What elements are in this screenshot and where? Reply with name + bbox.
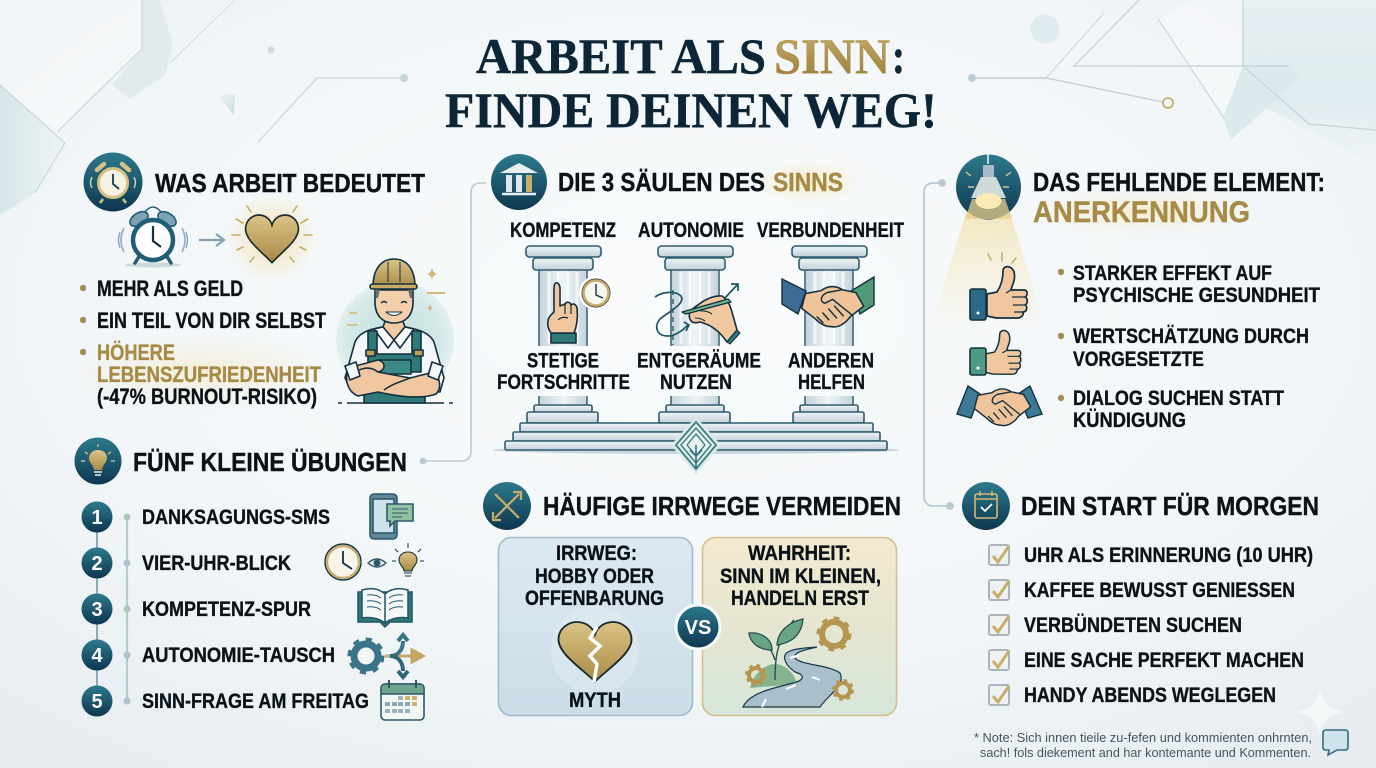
bullet list: MEHR ALS GELD (97, 276, 243, 301)
bullet list (1058, 262, 1320, 432)
footnote (974, 730, 1312, 760)
heading: FÜNF KLEINE ÜBUNGEN (133, 447, 407, 477)
heading: ANERKENNUNG (1033, 196, 1250, 229)
bullet list: DIALOG SUCHEN STATT (1073, 387, 1284, 410)
pillar sub labels (497, 350, 874, 394)
heading: WAS ARBEIT BEDEUTET (155, 168, 425, 198)
decoration: top-right geometric shapes (968, 0, 1376, 165)
bullet list: HÖHERE (97, 340, 175, 365)
title: ARBEIT ALS (476, 28, 766, 84)
icon: gear and diverging arrows (350, 635, 423, 677)
title: : (892, 28, 905, 84)
item 2: KAFFEE BEWUSST GENIESSEN (1024, 579, 1295, 602)
step 2 (82, 548, 291, 578)
card: Irrweg: HOBBY ODER (535, 565, 654, 588)
bullet list: (-47% BURNOUT-RISIKO) (97, 384, 317, 409)
pillar labels: KOMPETENZ (510, 219, 616, 242)
bullet list: LEBENSZUFRIEDENHEIT (97, 362, 321, 387)
step 5 (82, 686, 369, 716)
icon: small thumbs up (970, 331, 1021, 375)
heading (1025, 167, 1325, 236)
heading: DEIN START FÜR MORGEN (1021, 491, 1319, 521)
bullet list: EIN TEIL VON DIR SELBST (97, 308, 326, 333)
step 2: VIER-UHR-BLICK (142, 552, 291, 575)
card: Irrweg: MYTH (569, 689, 621, 712)
icon: handshake (957, 386, 1042, 426)
heading: DAS FEHLENDE ELEMENT: (1033, 167, 1325, 197)
card: Wahrheit: SINN IM KLEINEN, (720, 565, 881, 588)
icon: raised finger and clock (548, 278, 611, 343)
icon: clock, eye and bulb (325, 543, 424, 580)
icon: calendar check badge (962, 482, 1010, 530)
icon: handshake, blue and green (782, 277, 874, 327)
heading: HÄUFIGE IRRWEGE VERMEIDEN (543, 491, 901, 521)
bullet list (65, 276, 335, 410)
panel: Das fehlende Element (928, 154, 1325, 432)
step 2: 2 (91, 553, 103, 575)
icon: plant, road and gears (743, 619, 852, 707)
title: SINN (774, 28, 890, 84)
card: Wahrheit: HANDELN ERST (731, 587, 869, 610)
pillar labels (510, 219, 904, 242)
bullet list: WERTSCHÄTZUNG DURCH (1073, 325, 1309, 348)
icon: calendar (381, 680, 424, 720)
vs badge (676, 605, 720, 649)
panel: Dein Start für morgen (962, 482, 1348, 760)
step 4: AUTONOMIE-TAUSCH (142, 644, 335, 667)
step 5: 5 (91, 691, 103, 713)
panel: Was Arbeit bedeutet (65, 152, 454, 410)
title (445, 28, 937, 138)
connector: Das fehlende Element to Dein Start (924, 180, 953, 509)
card: Irrweg (498, 538, 692, 716)
pillar labels: VERBUNDENHEIT (757, 219, 904, 242)
icon: temple badge (491, 154, 547, 210)
step 1: 1 (91, 507, 103, 529)
card: Wahrheit: WAHRHEIT: (748, 542, 851, 565)
footnote: sach! fols diekement and har kontemante und Kommenten. (980, 745, 1311, 760)
icon: worker with helmet (336, 259, 454, 403)
icon: alarm clock badge (84, 152, 142, 212)
vs badge: VS (685, 617, 711, 639)
step 1 (82, 502, 330, 532)
bullet list: STARKER EFFEKT AUF (1073, 262, 1272, 285)
icon: golden heart (228, 194, 316, 282)
icon: phone with message (370, 494, 413, 539)
pillar labels: AUTONOMIE (638, 219, 744, 242)
pillars and steps (492, 246, 900, 454)
title: FINDE DEINEN WEG! (445, 82, 937, 138)
light cone (928, 200, 1048, 335)
pillar sub labels: NUTZEN (660, 371, 732, 394)
item 4: EINE SACHE PERFEKT MACHEN (1024, 649, 1304, 672)
item 1: UHR ALS ERINNERUNG (10 UHR) (1024, 544, 1313, 567)
step 1: DANKSAGUNGS-SMS (142, 506, 330, 529)
step 3: 3 (91, 599, 103, 621)
step 4: 4 (91, 645, 103, 667)
pillar sub labels: ANDEREN (788, 350, 874, 372)
heading: SINNS (773, 167, 843, 197)
connector: Fünf kleine Übungen to Die 3 Säulen (420, 183, 486, 464)
decorative sparkle (1296, 688, 1344, 736)
step 4 (82, 640, 335, 670)
bullet list: KÜNDIGUNG (1073, 409, 1186, 432)
heading: DIE 3 SÄULEN DES (558, 167, 765, 197)
pillar sub labels: STETIGE (527, 350, 599, 372)
icon: light bulb badge (74, 438, 122, 484)
timeline (97, 514, 130, 704)
icon: labyrinth diamond (673, 419, 719, 472)
footnote: * Note: Sich innen tieile zu-fefen und kommienten onhrnten, (974, 730, 1312, 745)
icon: open book (358, 589, 412, 627)
step 3: KOMPETENZ-SPUR (142, 598, 311, 621)
icon: large thumbs up (970, 253, 1027, 320)
pillar sub labels: HELFEN (798, 371, 865, 394)
icon: lamp badge (956, 154, 1021, 220)
heading (558, 160, 863, 204)
panel: Häufige Irrwege vermeiden (483, 482, 901, 716)
bullet list: VORGESETZTE (1073, 348, 1204, 371)
bullet list: PSYCHISCHE GESUNDHEIT (1073, 284, 1320, 307)
pillar sub labels: ENTGERÄUME (637, 350, 761, 372)
item 5: HANDY ABENDS WEGLEGEN (1024, 684, 1276, 707)
decoration: top-left geometric shapes (0, 0, 408, 215)
pillar sub labels: FORTSCHRITTE (497, 371, 630, 394)
card: Wahrheit (702, 538, 896, 716)
step 5: SINN-FRAGE AM FREITAG (142, 690, 369, 713)
step 3 (82, 594, 311, 624)
icon: ringing alarm clock (118, 207, 188, 268)
icon: crossing arrows badge (483, 482, 531, 530)
card: Irrweg: OFFENBARUNG (525, 587, 664, 610)
arrow (199, 234, 224, 246)
icon: broken heart (551, 606, 639, 694)
card: Irrweg: IRRWEG: (556, 542, 637, 565)
item 3: VERBÜNDETEN SUCHEN (1024, 614, 1242, 637)
checklist (989, 544, 1313, 707)
icon: speech bubble (1323, 730, 1348, 755)
panel: Die 3 Säulen des Sinns (491, 154, 904, 472)
panel: Fünf kleine Übungen (74, 438, 424, 720)
icon: hand drawing path (655, 284, 740, 345)
